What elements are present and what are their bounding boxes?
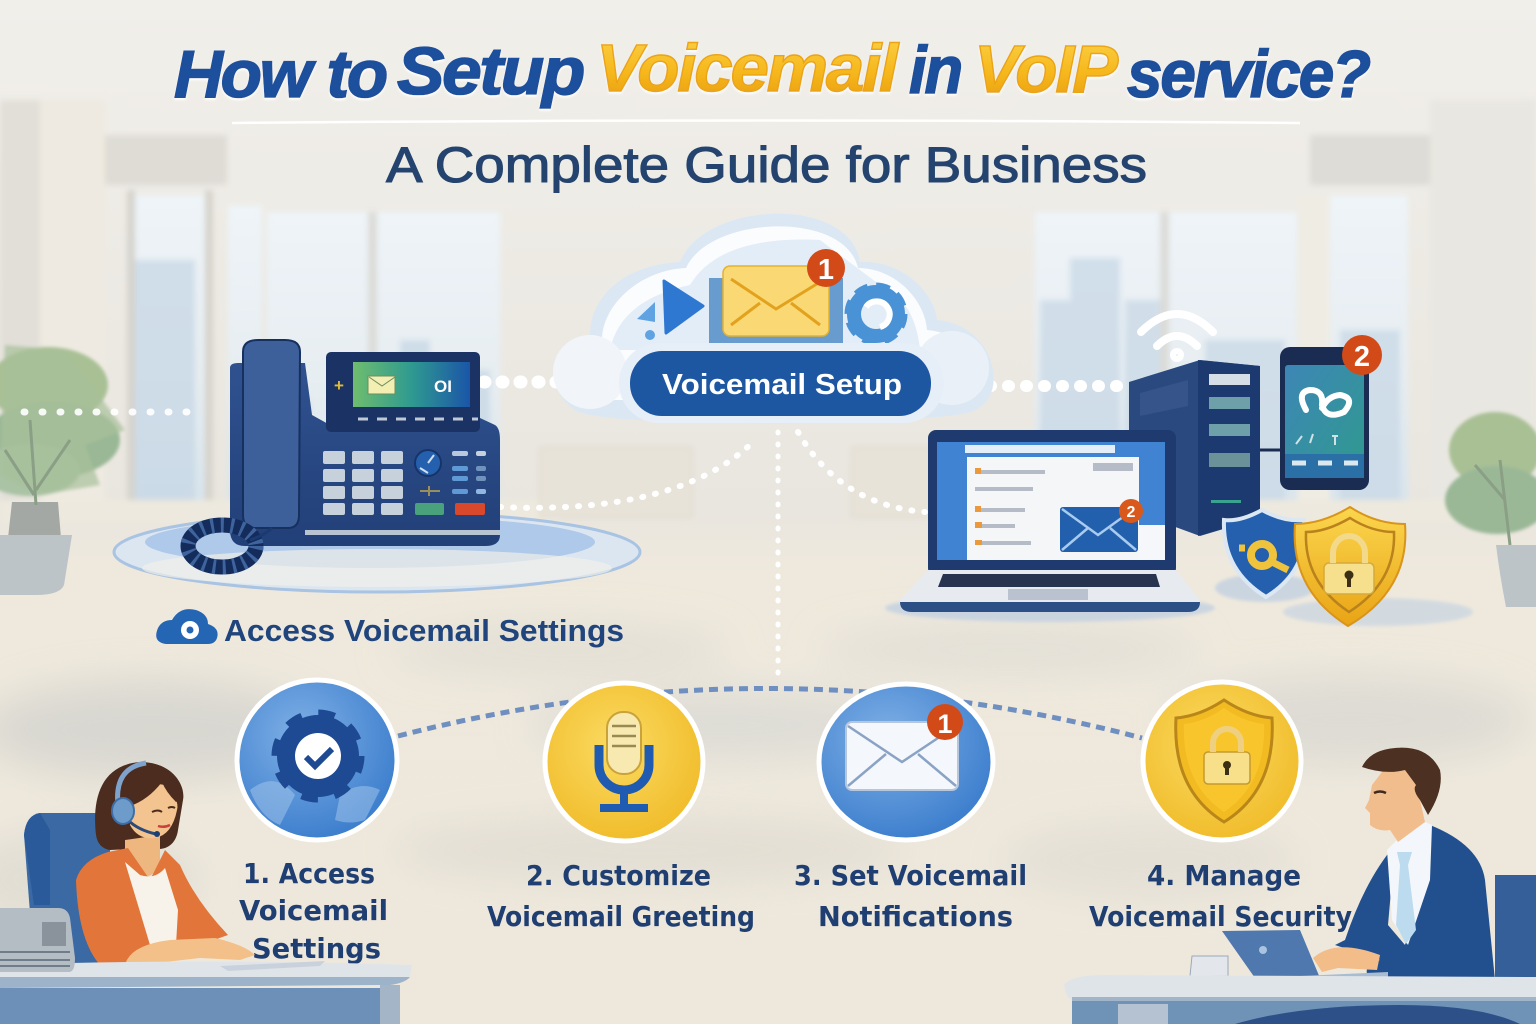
coiled cord — [188, 525, 272, 567]
step 1: access voicemail settings — [237, 680, 397, 965]
keypad — [323, 451, 403, 515]
icon: envelope with badge — [709, 249, 845, 346]
dotted connectors — [24, 382, 1142, 738]
step 3 label — [794, 859, 1027, 933]
businessman with laptop at desk — [1064, 748, 1536, 1024]
phone body — [230, 363, 500, 546]
icon: microphone — [545, 683, 703, 841]
phone screen — [326, 352, 480, 432]
floor shading — [0, 624, 1530, 930]
receptionist with headset at desk — [0, 762, 412, 1024]
desk box — [1190, 956, 1228, 976]
icon: envelope with badge — [819, 684, 993, 840]
voicemail setup pill: Voicemail Setup — [662, 369, 902, 401]
phone screen: OI — [434, 377, 452, 396]
badge 2: 2 — [1354, 341, 1370, 373]
shirt and tie — [1387, 822, 1432, 945]
shirt — [125, 862, 178, 945]
icon: wifi — [1141, 314, 1213, 358]
arm — [125, 938, 255, 966]
step 4 label — [1089, 859, 1352, 933]
laptop — [1222, 930, 1388, 982]
right plant — [1445, 412, 1536, 607]
icon: play arrow — [637, 281, 703, 340]
icon: gear — [849, 287, 903, 341]
handset — [243, 340, 300, 528]
phone screen: + — [334, 376, 344, 395]
desk — [1064, 975, 1536, 1000]
icon: laptop envelope: 2 — [1127, 504, 1136, 521]
jacket — [76, 848, 228, 965]
step 2: customize voicemail greeting — [487, 683, 755, 933]
desk printer — [0, 908, 75, 972]
title: How to — [174, 37, 386, 112]
left plant — [0, 345, 125, 595]
step 2 label: 2. Customize — [526, 859, 711, 892]
desk — [0, 962, 412, 988]
title: VoIP — [974, 32, 1119, 107]
badge 2 — [1342, 335, 1382, 375]
icon: envelope with badge: 1 — [937, 709, 953, 739]
step 4: manage voicemail security — [1089, 682, 1352, 933]
icon: padlock shield — [1143, 682, 1301, 840]
step 3 label: Notifications — [818, 900, 1013, 933]
step 2 label: Voicemail Greeting — [487, 900, 755, 933]
server tower and wifi — [1129, 314, 1282, 536]
title: Voicemail — [596, 31, 900, 106]
neck and face — [125, 835, 160, 878]
platform — [114, 512, 640, 592]
security shields — [1215, 507, 1473, 626]
dial and function keys — [415, 450, 486, 515]
chair — [1495, 875, 1536, 980]
laptop with inbox — [885, 430, 1215, 622]
head — [1365, 768, 1428, 842]
title — [174, 31, 1370, 112]
smartphone — [1280, 335, 1382, 490]
icon: cloud gear — [156, 609, 218, 644]
laptop base — [900, 570, 1200, 612]
access voicemail settings label: Access Voicemail Settings — [224, 613, 624, 648]
center cabinets — [540, 447, 692, 517]
cloud shape — [553, 214, 994, 423]
step 2 label — [487, 859, 755, 933]
voicemail setup pill — [619, 343, 944, 423]
step 3: set voicemail notifications — [794, 684, 1027, 933]
blue shield — [1224, 510, 1305, 597]
subtitle: A Complete Guide for Business — [386, 137, 1147, 193]
step 1 label: Settings — [252, 932, 381, 965]
cloud: voicemail setup — [553, 214, 994, 423]
chair — [24, 813, 110, 965]
step 4 label: Voicemail Security — [1089, 900, 1352, 933]
hair back — [95, 762, 183, 850]
suit — [1335, 825, 1495, 980]
step 1 label: 1. Access — [243, 857, 375, 890]
step 4 label: 4. Manage — [1147, 859, 1301, 892]
gold shield — [1295, 507, 1405, 626]
step 1 label: Voicemail — [239, 894, 388, 927]
title: Setup — [397, 34, 583, 109]
step 1 label — [239, 857, 388, 965]
step 3 label: 3. Set Voicemail — [794, 859, 1027, 892]
title: in — [909, 33, 961, 108]
hair — [1362, 748, 1441, 815]
icon: envelope with badge: 1 — [818, 254, 834, 286]
icon: laptop envelope — [1060, 499, 1143, 552]
title: service? — [1127, 37, 1370, 112]
icon: gear check — [237, 680, 397, 840]
headset — [112, 763, 160, 837]
hand — [1313, 947, 1380, 972]
desk phone on platform — [114, 340, 640, 592]
